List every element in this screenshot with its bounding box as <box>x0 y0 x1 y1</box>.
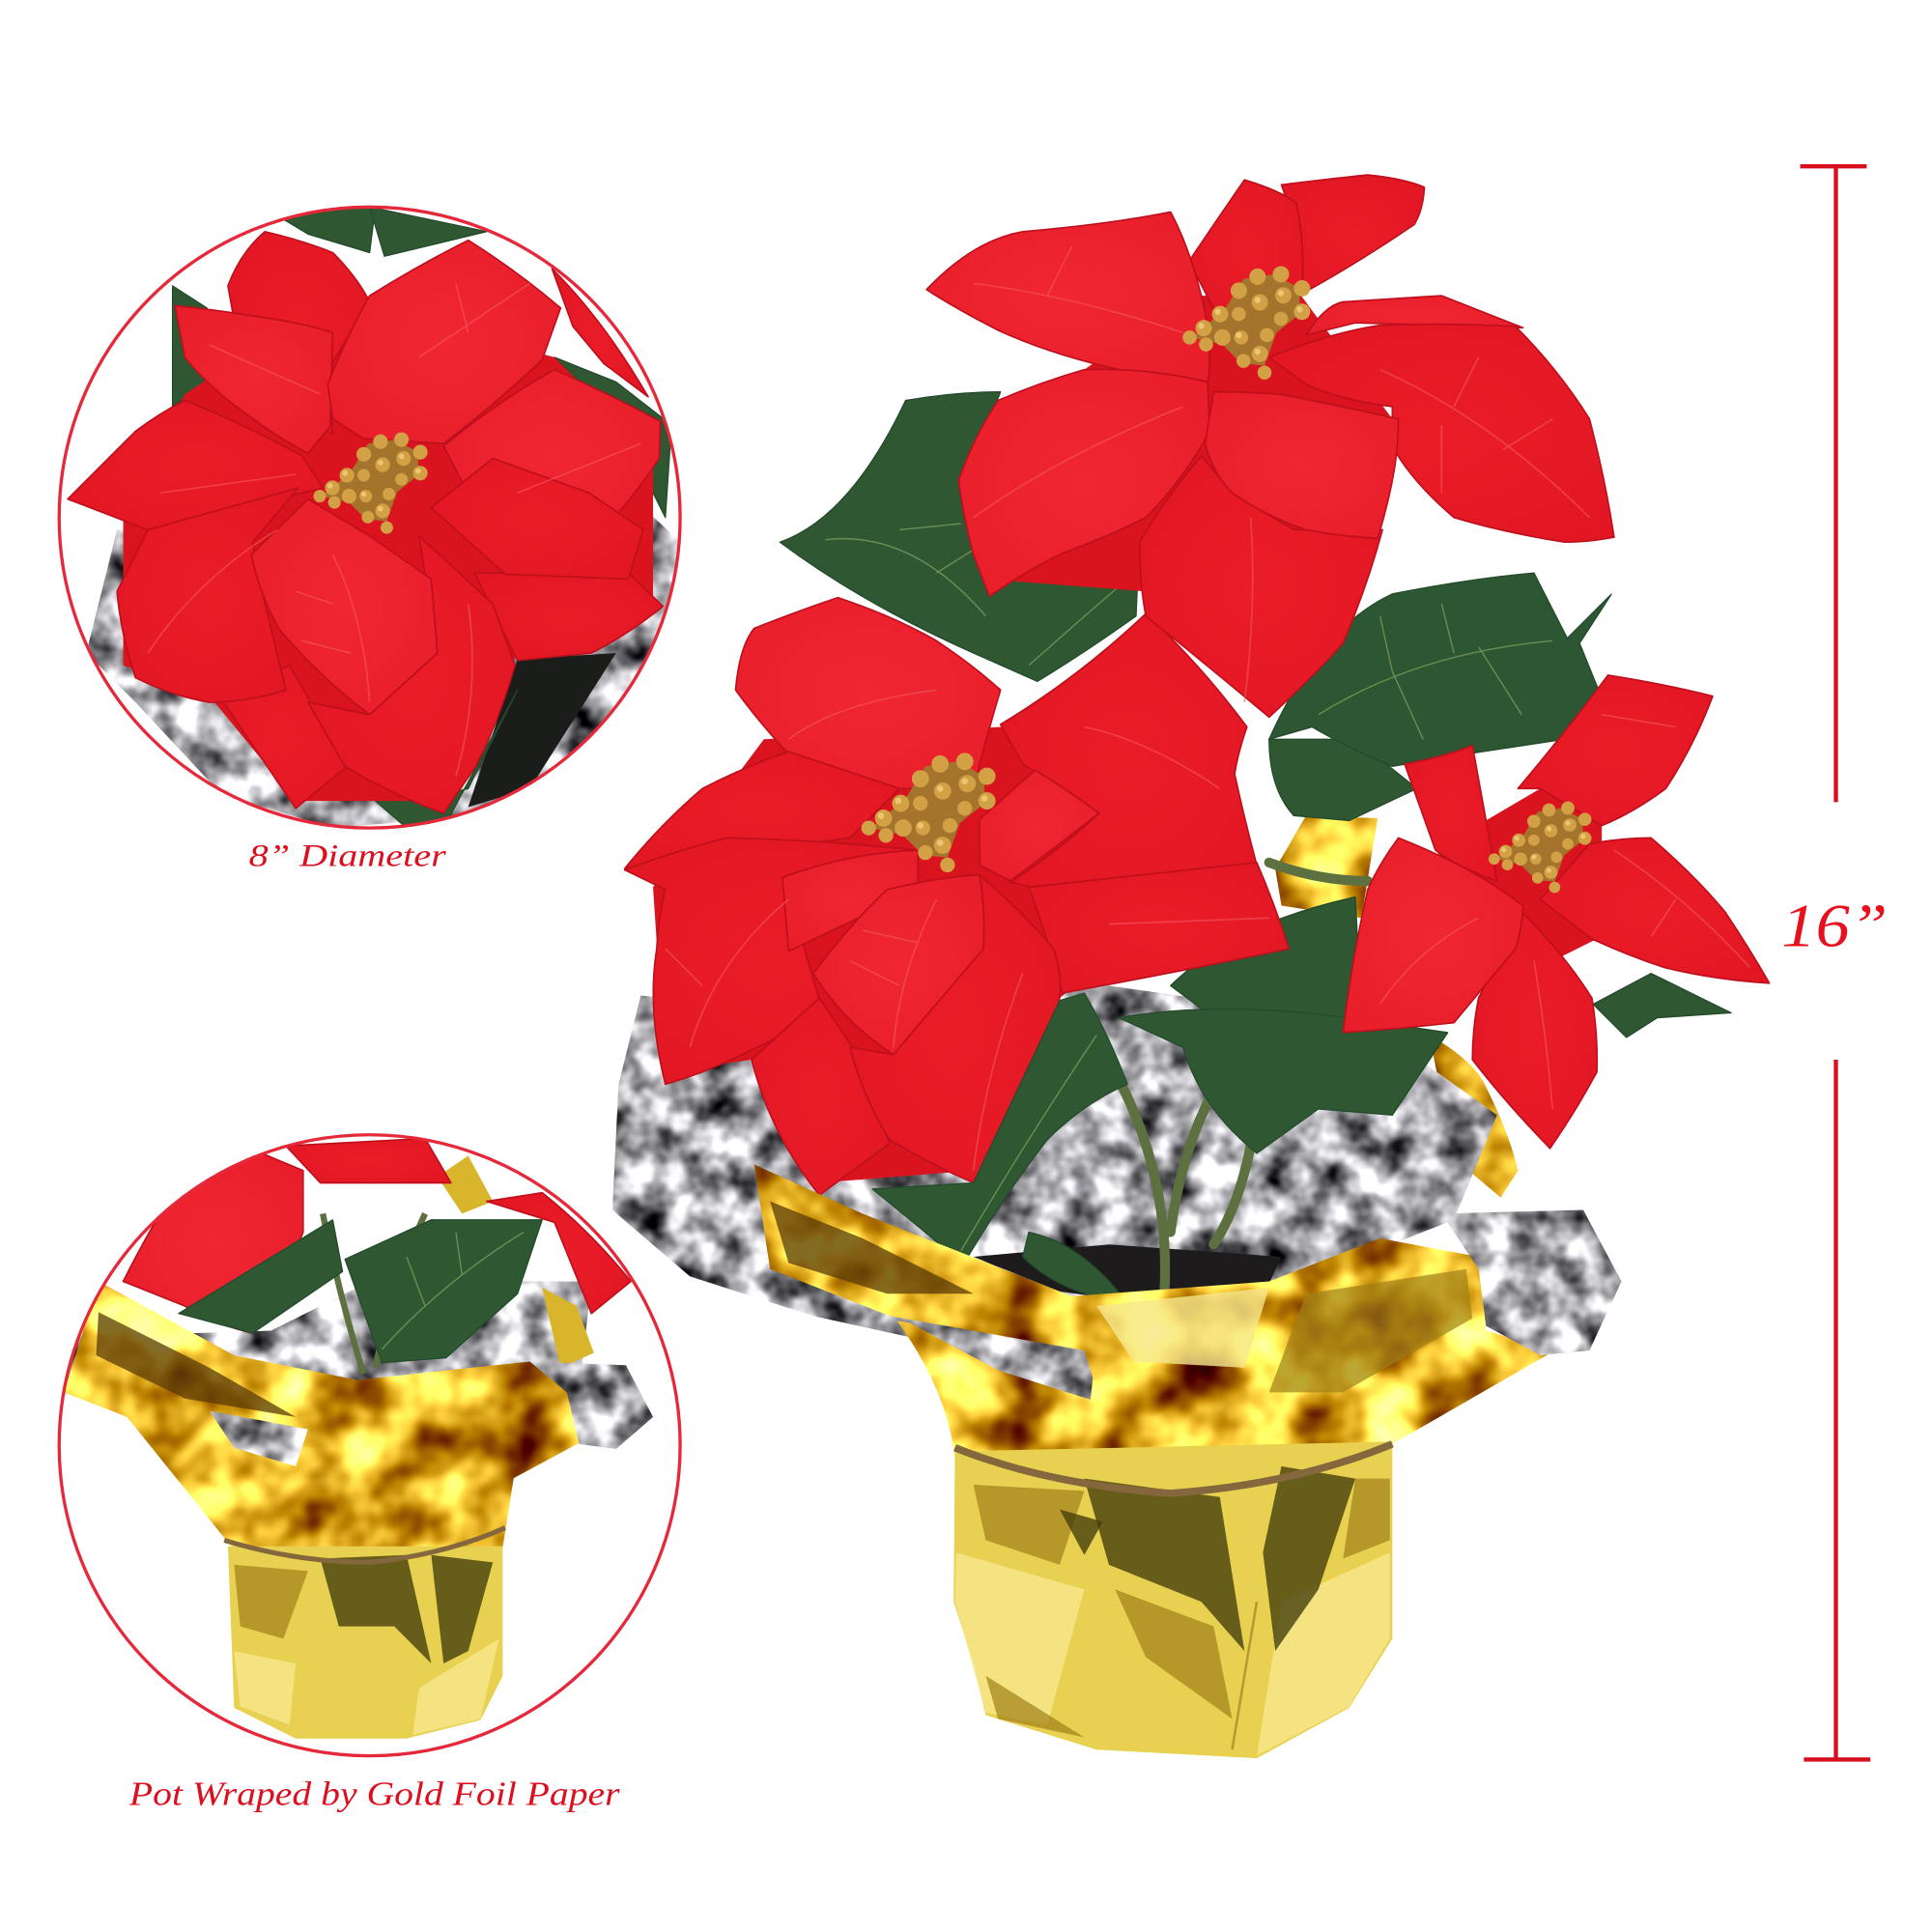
twine <box>224 1528 505 1562</box>
silver foil behind flower <box>86 493 680 828</box>
gold pot body <box>228 1547 502 1739</box>
foil: silver fold left <box>890 1312 1096 1400</box>
height label: 16” <box>1781 892 1888 960</box>
foil: silver inner wrap <box>612 985 1497 1343</box>
circle outline <box>59 1135 680 1756</box>
leaf: lower green leaves <box>1023 897 1448 1303</box>
upper bracket <box>1801 166 1866 802</box>
flower: top poinsettia <box>926 175 1614 717</box>
silver fold and rim <box>210 1361 653 1466</box>
lower bracket <box>1804 1060 1870 1759</box>
dark gap behind flower <box>469 653 616 807</box>
caption: diameter: 8” Diameter <box>249 838 446 874</box>
circle outline <box>59 207 680 828</box>
red petals <box>68 232 663 813</box>
stems <box>323 1213 425 1374</box>
green leaves <box>179 1220 542 1363</box>
green leaves behind flower <box>173 203 671 828</box>
foil: front gold flap <box>754 1164 1555 1444</box>
red petals top <box>124 1139 631 1333</box>
silver foil behind pot <box>66 1281 589 1395</box>
foil: silver rim right <box>1441 1210 1622 1355</box>
flower: small right poinsettia <box>1343 675 1770 1149</box>
detail circle: flower diameter <box>59 203 680 828</box>
foil: gold pot body <box>953 1441 1392 1758</box>
foil: neck of pot <box>897 1321 1392 1466</box>
foil: back gold pieces <box>1275 815 1518 1198</box>
circle photo: flower close-up <box>59 203 680 828</box>
back gold bits <box>438 1155 594 1368</box>
caption: gold foil pot: Pot Wraped by Gold Foil Paper <box>128 1776 620 1813</box>
soil <box>974 1244 1282 1306</box>
gold neck <box>127 1416 514 1548</box>
leaf: upper left green leaf <box>780 392 1140 681</box>
stems <box>1122 863 1368 1293</box>
twine around the pot <box>955 1444 1392 1493</box>
flower: middle large poinsettia <box>625 598 1289 1195</box>
circle photo: pot close-up <box>59 1135 680 1756</box>
leaf: lower right behind small flower <box>1593 974 1731 1037</box>
gold flap <box>66 1285 580 1478</box>
leaf: bottom green leaf <box>872 993 1127 1264</box>
leaf: right upper green leaf <box>1269 573 1622 820</box>
photo: main potted poinsettia <box>612 175 1770 1758</box>
dimension marker: height <box>1781 166 1888 1759</box>
detail circle: gold foil pot <box>59 1135 680 1756</box>
